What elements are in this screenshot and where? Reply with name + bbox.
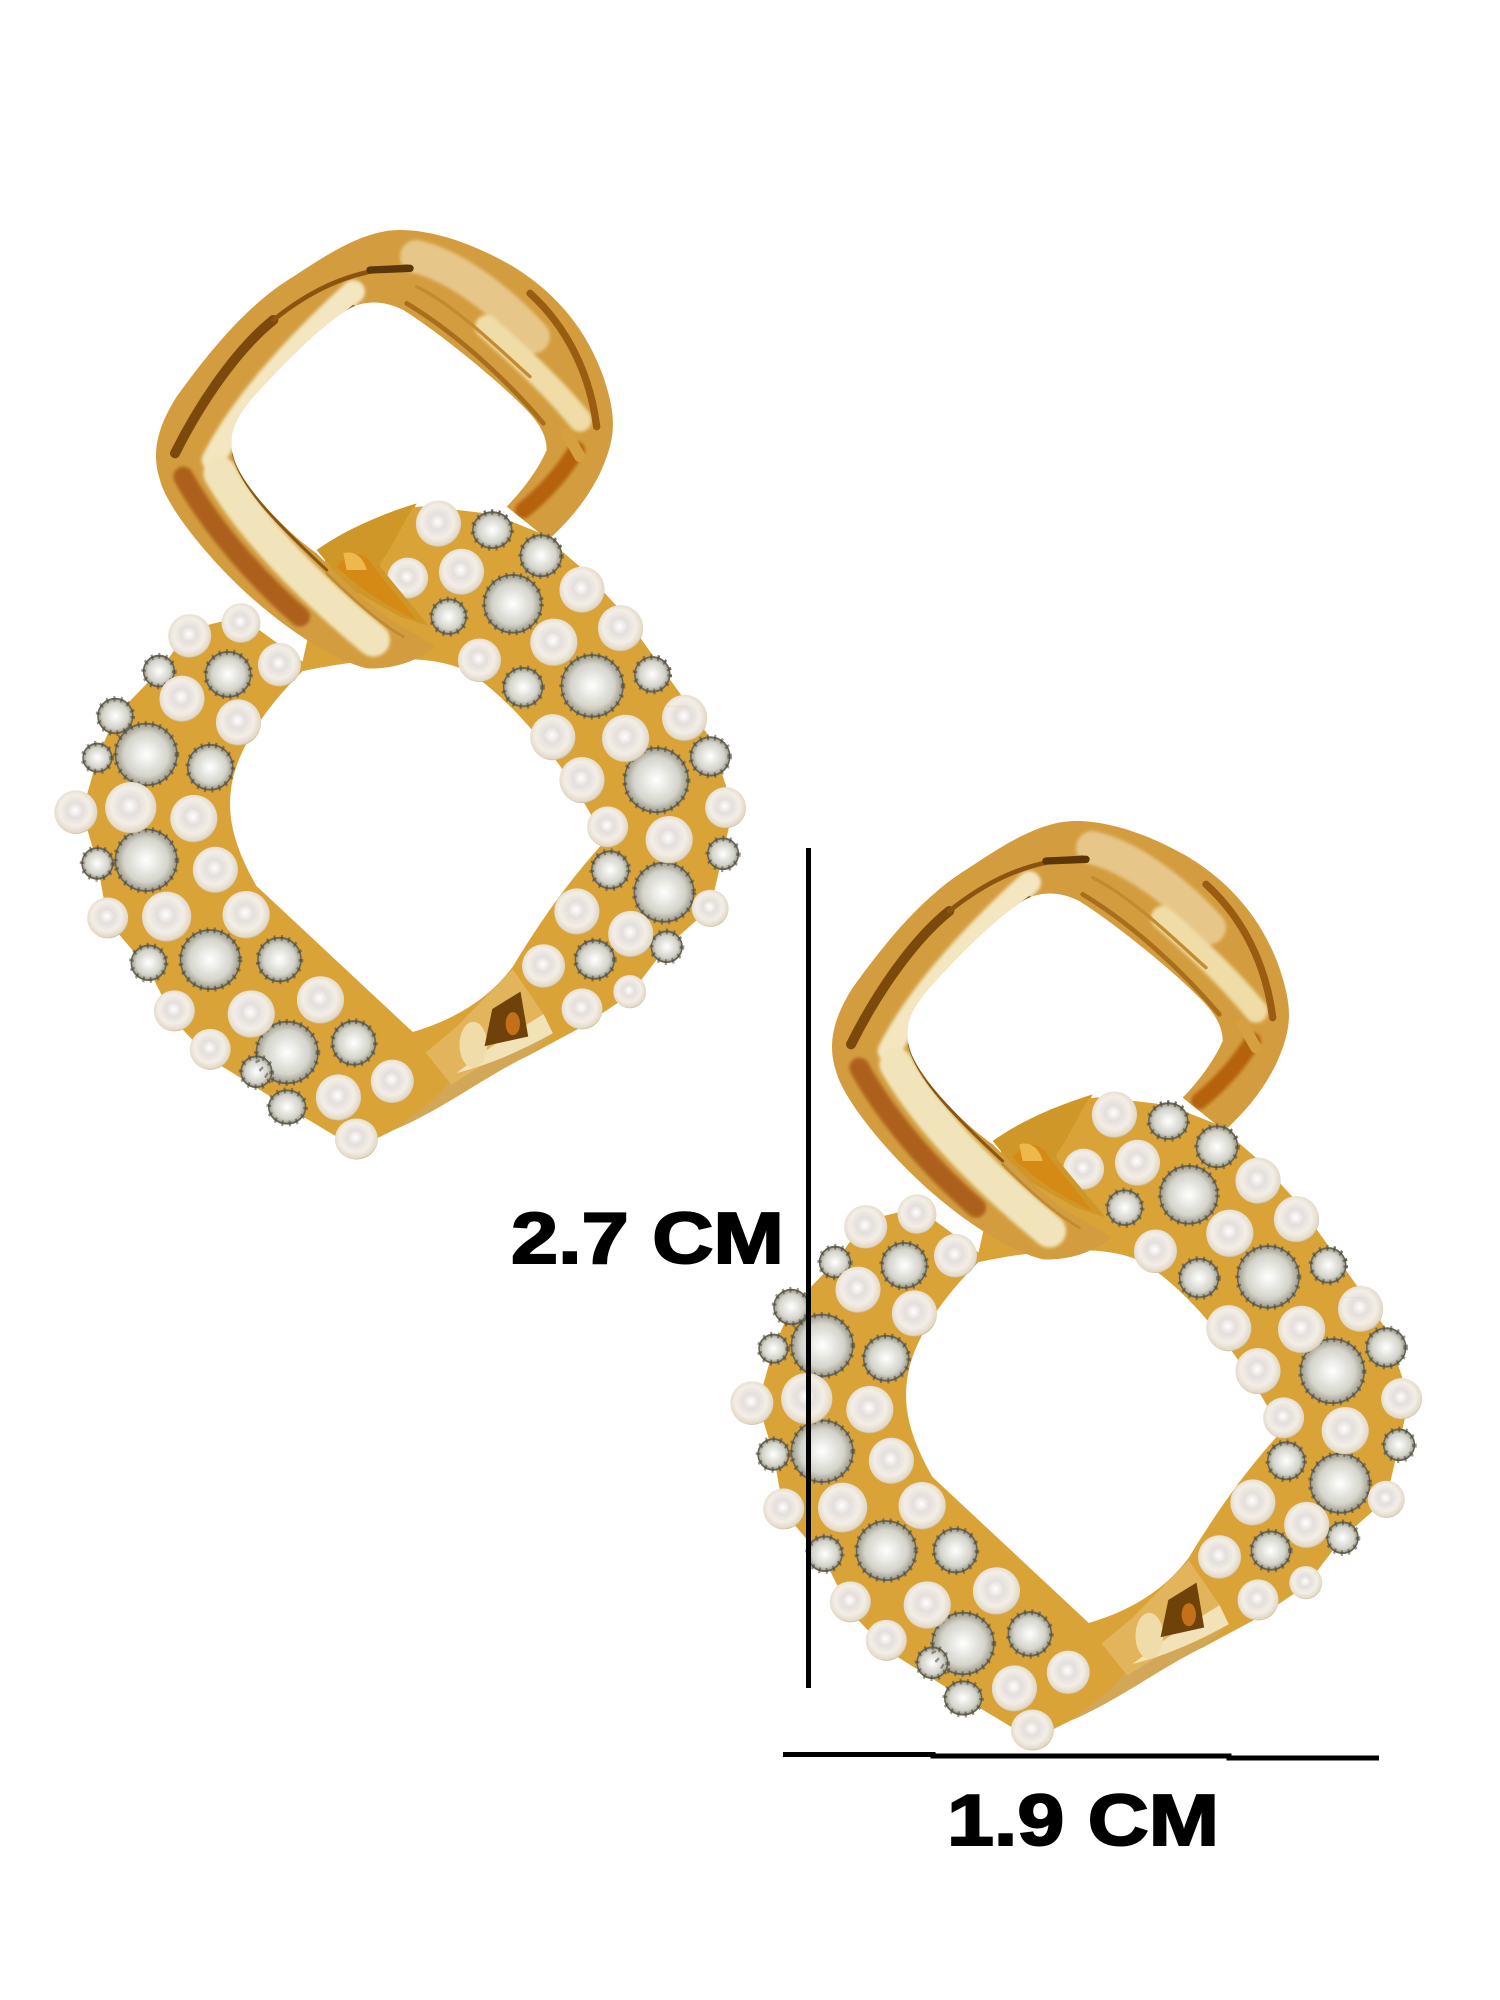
height label: 2.7 CM <box>511 1199 784 1279</box>
height dimension line <box>806 848 811 1688</box>
width label: 1.9 CM <box>947 1781 1219 1861</box>
earring: upper left <box>54 230 746 1160</box>
width dimension line <box>783 1754 1379 1758</box>
earring: lower right <box>730 821 1422 1751</box>
